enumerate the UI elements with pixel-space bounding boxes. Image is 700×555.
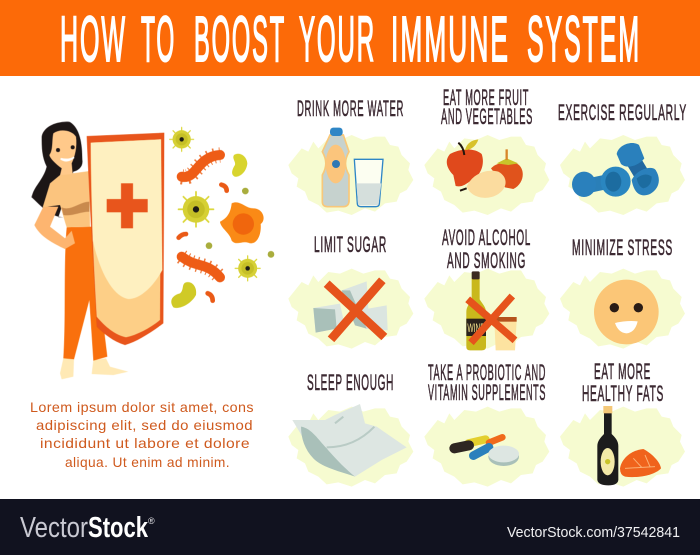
- tip: eat more fruit and vegetables: EAT MORE FRUIT: [443, 85, 529, 110]
- footer logo: [20, 512, 155, 544]
- footer logo: ®: [148, 516, 155, 526]
- tip: minimize stress: [560, 235, 685, 349]
- tip: avoid alcohol and smoking: AND SMOKING: [447, 248, 526, 273]
- title: BOOST: [194, 3, 286, 75]
- text: AND VEGETABLES: [441, 104, 533, 129]
- body text: aliqua. Ut enim ad minim.: [65, 454, 230, 470]
- title: IMMUNE: [391, 3, 510, 75]
- woman figure: [32, 122, 128, 379]
- footer id: VectorStock.com/37542841: [507, 524, 680, 541]
- shield: [87, 133, 164, 345]
- body text: adipiscing elit, sed do eiusmod: [36, 417, 253, 433]
- tip: sleep enough: SLEEP ENOUGH: [307, 370, 394, 395]
- title: HOW: [60, 3, 127, 75]
- body text: [30, 399, 254, 470]
- title: YOUR: [299, 3, 376, 75]
- footer logo: Vector: [20, 512, 88, 544]
- tip: drink more water: [288, 96, 413, 215]
- footer logo: Stock: [88, 512, 149, 544]
- cross mark: [468, 296, 515, 343]
- tip: avoid alcohol and smoking: [424, 225, 549, 350]
- tip: limit sugar: [288, 232, 413, 349]
- tip: limit sugar: LIMIT SUGAR: [314, 232, 387, 257]
- illustration: woman with shield and germs: [32, 122, 274, 379]
- title: TO: [141, 3, 176, 75]
- cross mark: [327, 280, 384, 339]
- title: [60, 3, 641, 75]
- tip: eat more healthy fats: [560, 359, 685, 487]
- tip: sleep enough: [288, 370, 413, 487]
- tip: exercise regularly: [558, 100, 687, 215]
- tip: avoid alcohol and smoking: AVOID ALCOHOL: [442, 225, 531, 250]
- footer bar: [0, 499, 700, 555]
- text: DRINK MORE WATER: [297, 96, 404, 121]
- body text: incididunt ut labore et dolore: [40, 435, 250, 451]
- tip: eat more fruit and vegetables: [424, 85, 549, 215]
- header banner: [0, 0, 700, 76]
- germs: [170, 127, 274, 308]
- tip: avoid alcohol and smoking: WINE: [467, 321, 485, 335]
- tip: take a probiotic and vitamin supplements: [424, 360, 549, 487]
- body text: Lorem ipsum dolor sit amet, cons: [30, 399, 254, 415]
